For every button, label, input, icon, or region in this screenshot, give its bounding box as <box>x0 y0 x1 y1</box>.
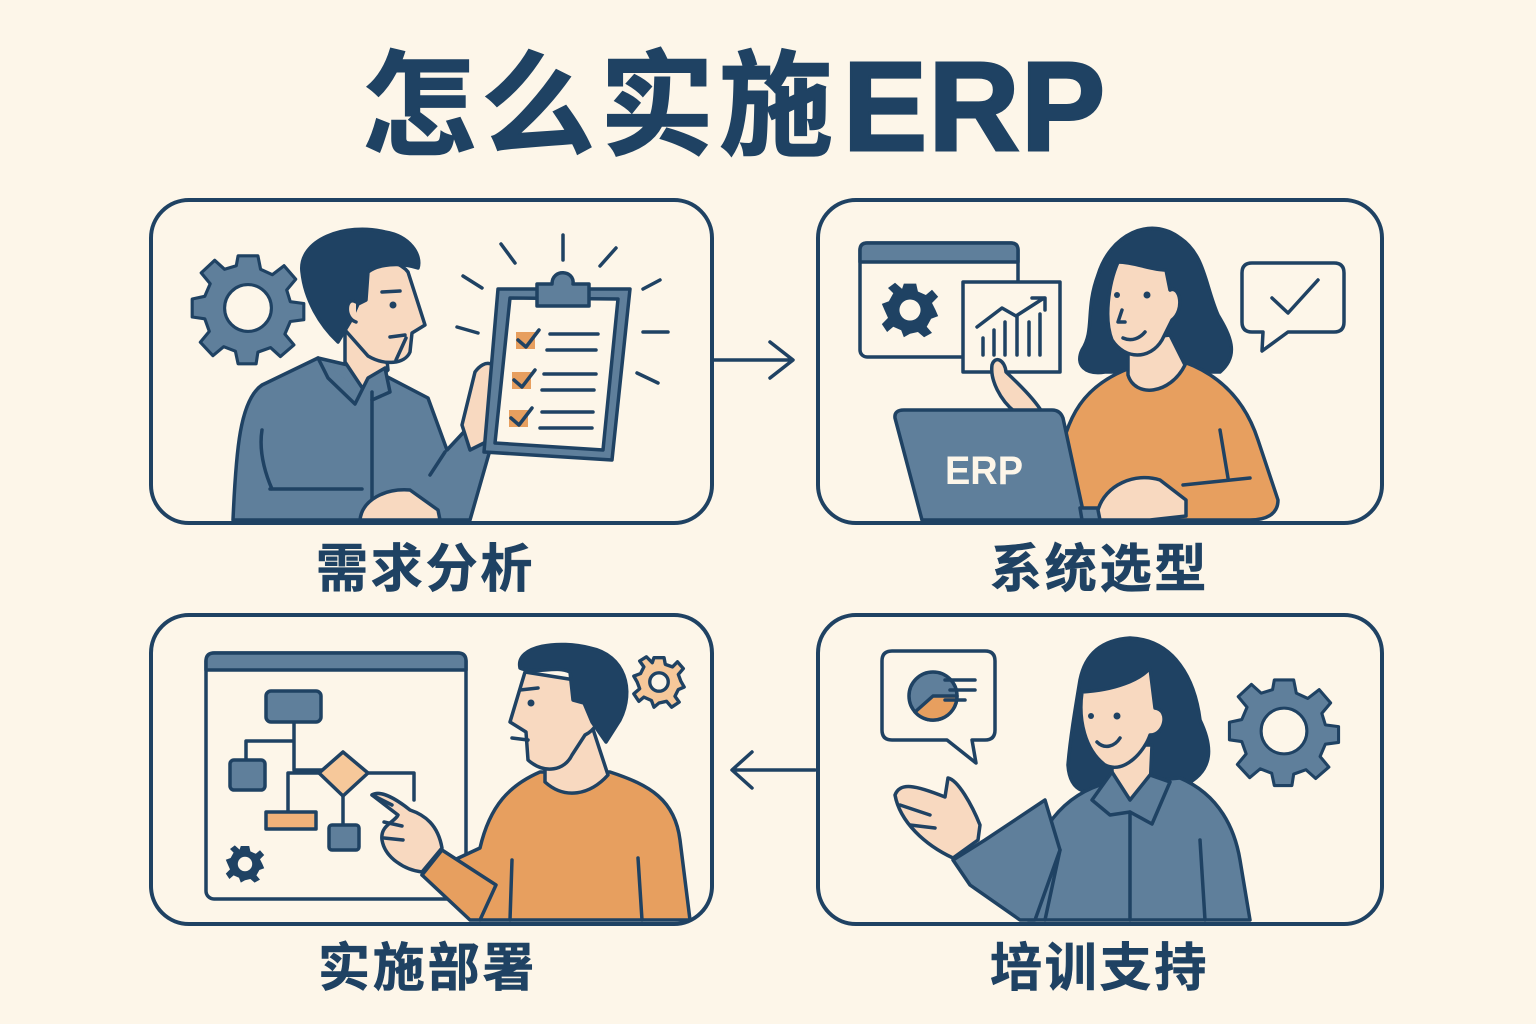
icon: settings window <box>860 243 1018 357</box>
person: man with clipboard <box>233 229 497 520</box>
title: 怎么实施 <box>362 44 838 171</box>
person: man pointing <box>372 644 690 920</box>
icon: flowchart window <box>206 653 466 899</box>
icon: chart card <box>963 282 1060 372</box>
arrow: step 1 to 2 <box>714 342 793 378</box>
person: woman at laptop <box>1058 228 1278 520</box>
hand on chart <box>992 360 1042 412</box>
icon: speech bubble pie chart <box>882 651 995 763</box>
icon: gear <box>1229 680 1339 786</box>
icon: clipboard checklist <box>457 235 668 460</box>
person: woman presenting <box>895 638 1250 920</box>
title <box>362 36 1105 177</box>
icon: laptop ERP: ERP <box>945 449 1023 493</box>
panel: deployment <box>151 615 712 924</box>
label: 实施部署: 实施部署 <box>318 940 537 998</box>
panel: training support <box>818 615 1382 924</box>
icon: gear <box>192 256 304 364</box>
icon: small gear <box>634 657 684 707</box>
label: 培训支持: 培训支持 <box>990 940 1209 998</box>
panel: requirements analysis <box>151 200 712 523</box>
icon: speech bubble check <box>1242 263 1344 351</box>
arrow: step 4 to 3 <box>732 752 815 788</box>
label: 系统选型: 系统选型 <box>990 541 1209 599</box>
panel: system selection <box>818 200 1382 523</box>
title: ERP <box>843 36 1105 177</box>
icon: laptop ERP <box>895 410 1186 520</box>
label: 需求分析: 需求分析 <box>316 541 535 599</box>
